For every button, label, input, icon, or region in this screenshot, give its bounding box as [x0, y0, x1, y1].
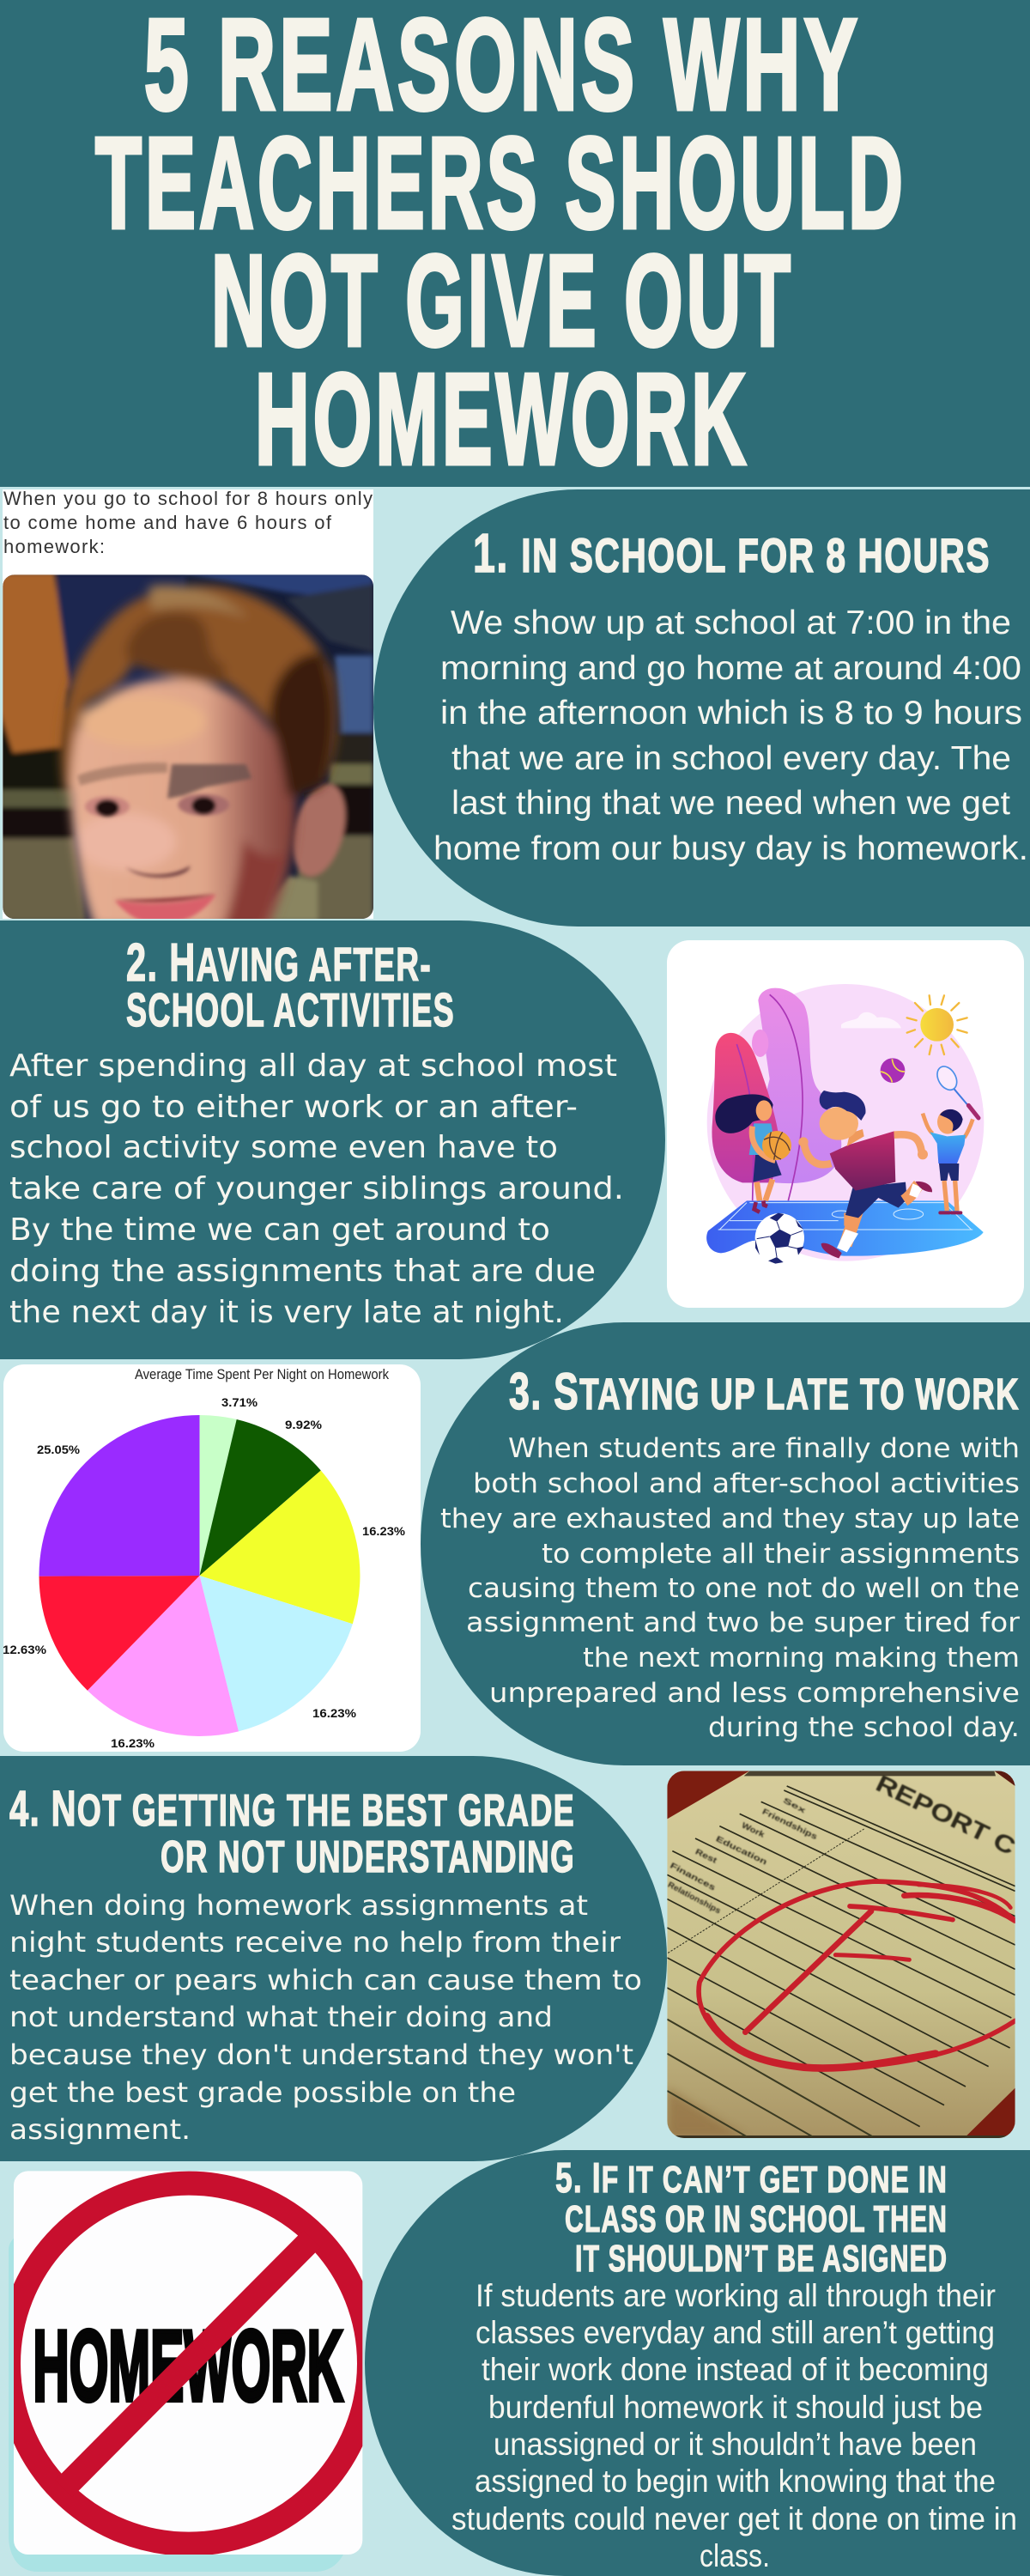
- body text: reason 1: last thing that we need when we get: [451, 785, 1010, 822]
- body text: reason 5: [451, 2278, 1017, 2573]
- pie labels: 16.23%: [111, 1736, 155, 1750]
- chart title: Average Time Spent Per Night on Homework: [135, 1367, 390, 1382]
- body text: reason 2: [9, 1048, 624, 1330]
- body text: reason 5: their work done instead of it becoming: [482, 2352, 989, 2387]
- report card labels: Work: [740, 1820, 766, 1839]
- body text: reason 5: burdenful homework it should just be: [488, 2390, 983, 2425]
- body text: reason 3: the next morning making them: [583, 1643, 1020, 1674]
- title banner: [0, 0, 1030, 491]
- pie labels: 16.23%: [312, 1706, 357, 1720]
- body text: reason 4: teacher or pears which can cause them to: [9, 1964, 642, 1996]
- body text: reason 1: home from our busy day is homework.: [433, 830, 1028, 867]
- body text: reason 3: during the school day.: [708, 1712, 1020, 1743]
- body text: reason 4: [9, 1889, 642, 2146]
- pie labels: 25.05%: [37, 1443, 81, 1456]
- body text: reason 3: causing them to one not do well on the: [468, 1573, 1020, 1604]
- body text: reason 2: After spending all day at school most: [9, 1048, 617, 1084]
- illustration: [706, 984, 984, 1264]
- heading: reason 4: 4. NOT GETTING THE BEST GRADE: [9, 1781, 575, 1837]
- body text: reason 3: assignment and two be super tired for: [466, 1607, 1020, 1638]
- body text: reason 2: By the time we can get around to: [9, 1212, 550, 1248]
- report card labels: [666, 1770, 1020, 1916]
- image: kids playing sports: [667, 940, 1024, 1308]
- report card labels: Education: [714, 1834, 769, 1867]
- body text: reason 2: the next day it is very late at night.: [9, 1295, 564, 1330]
- panel: reason 2: [0, 920, 665, 1359]
- image: meme of worried boy: [0, 488, 373, 927]
- body text: reason 2: of us go to either work or an after-: [9, 1090, 578, 1125]
- body text: reason 3: both school and after-school activities: [473, 1468, 1020, 1499]
- body text: reason 5: class.: [700, 2538, 770, 2573]
- body text: reason 3: unprepared and less comprehensive: [489, 1678, 1020, 1709]
- body text: reason 1: We show up at school at 7:00 in the: [451, 605, 1011, 641]
- pie labels: 16.23%: [362, 1524, 406, 1538]
- heading: reason 2: SCHOOL ACTIVITIES: [126, 983, 455, 1036]
- body text: reason 2: school activity some even have to: [9, 1130, 558, 1165]
- image: no homework sign: [9, 2171, 369, 2572]
- body text: reason 2: take care of younger siblings around.: [9, 1171, 624, 1206]
- body text: reason 5: classes everyday and still aren’t getting: [476, 2315, 995, 2350]
- panel: reason 4: [0, 1756, 667, 2161]
- heading: reason 4: [9, 1781, 575, 1882]
- panel: reason 5: [365, 2150, 1030, 2576]
- report card labels: Finances: [669, 1861, 717, 1892]
- body text: reason 4: get the best grade possible on the: [9, 2076, 516, 2109]
- image: pie chart card: [3, 1364, 421, 1752]
- meme caption: [3, 488, 373, 557]
- sign artwork: [9, 2184, 369, 2544]
- body text: reason 2: doing the assignments that are due: [9, 1254, 596, 1289]
- body text: reason 1: in the afternoon which is 8 to 9 hours: [440, 695, 1022, 732]
- body text: reason 3: When students are finally done with: [508, 1433, 1020, 1464]
- heading: reason 5: [555, 2155, 948, 2280]
- report card labels: Friendships: [760, 1807, 819, 1841]
- heading: reason 4: OR NOT UNDERSTANDING: [161, 1832, 575, 1882]
- report card labels: REPORT C: [872, 1770, 1020, 1860]
- heading: reason 2: 2. HAVING AFTER-: [126, 933, 432, 993]
- body text: reason 4: When doing homework assignments at: [9, 1889, 588, 1922]
- heading: reason 2: [126, 933, 455, 1036]
- body text: reason 3: to complete all their assignments: [542, 1539, 1020, 1570]
- boy's head: [61, 585, 337, 927]
- body text: reason 5: unassigned or it shouldn’t have been: [494, 2427, 977, 2462]
- meme caption: to come home and have 6 hours of: [3, 512, 332, 533]
- body text: reason 5: assigned to begin with knowing that the: [475, 2464, 996, 2499]
- body text: reason 3: [440, 1433, 1020, 1743]
- image: report card with red F: [666, 1770, 1020, 2138]
- body text: reason 3: they are exhausted and they stay up late: [440, 1504, 1020, 1534]
- pie labels: [3, 1395, 406, 1750]
- body text: reason 4: because they don't understand they won't: [9, 2038, 633, 2071]
- pie chart: [39, 1415, 360, 1736]
- body text: reason 1: that we are in school every day. The: [451, 740, 1011, 777]
- red circle and F: [699, 1881, 1015, 2069]
- pie labels: 12.63%: [3, 1643, 47, 1656]
- meme caption: When you go to school for 8 hours only: [3, 488, 373, 509]
- body text: reason 5: If students are working all through their: [476, 2278, 996, 2313]
- pie labels: 9.92%: [285, 1418, 323, 1431]
- body text: reason 1: morning and go home at around 4:00: [440, 650, 1021, 687]
- body text: reason 4: night students receive no help from their: [9, 1926, 621, 1959]
- panel: reason 3: [421, 1322, 1030, 1765]
- title: [95, 0, 906, 491]
- meme caption: homework:: [3, 536, 105, 557]
- pie labels: 3.71%: [221, 1395, 258, 1409]
- report card labels: Relationships: [666, 1880, 722, 1916]
- body text: reason 1: [433, 605, 1028, 867]
- sign artwork: HOMEWORK: [33, 2309, 343, 2421]
- body text: reason 4: assignment.: [9, 2113, 191, 2146]
- report card labels: Sex: [782, 1795, 808, 1815]
- meme photo: [0, 573, 373, 927]
- panel: reason 1: [373, 489, 1030, 927]
- body text: reason 4: not understand what their doing and: [9, 2001, 553, 2033]
- report card labels: Rest: [694, 1847, 718, 1865]
